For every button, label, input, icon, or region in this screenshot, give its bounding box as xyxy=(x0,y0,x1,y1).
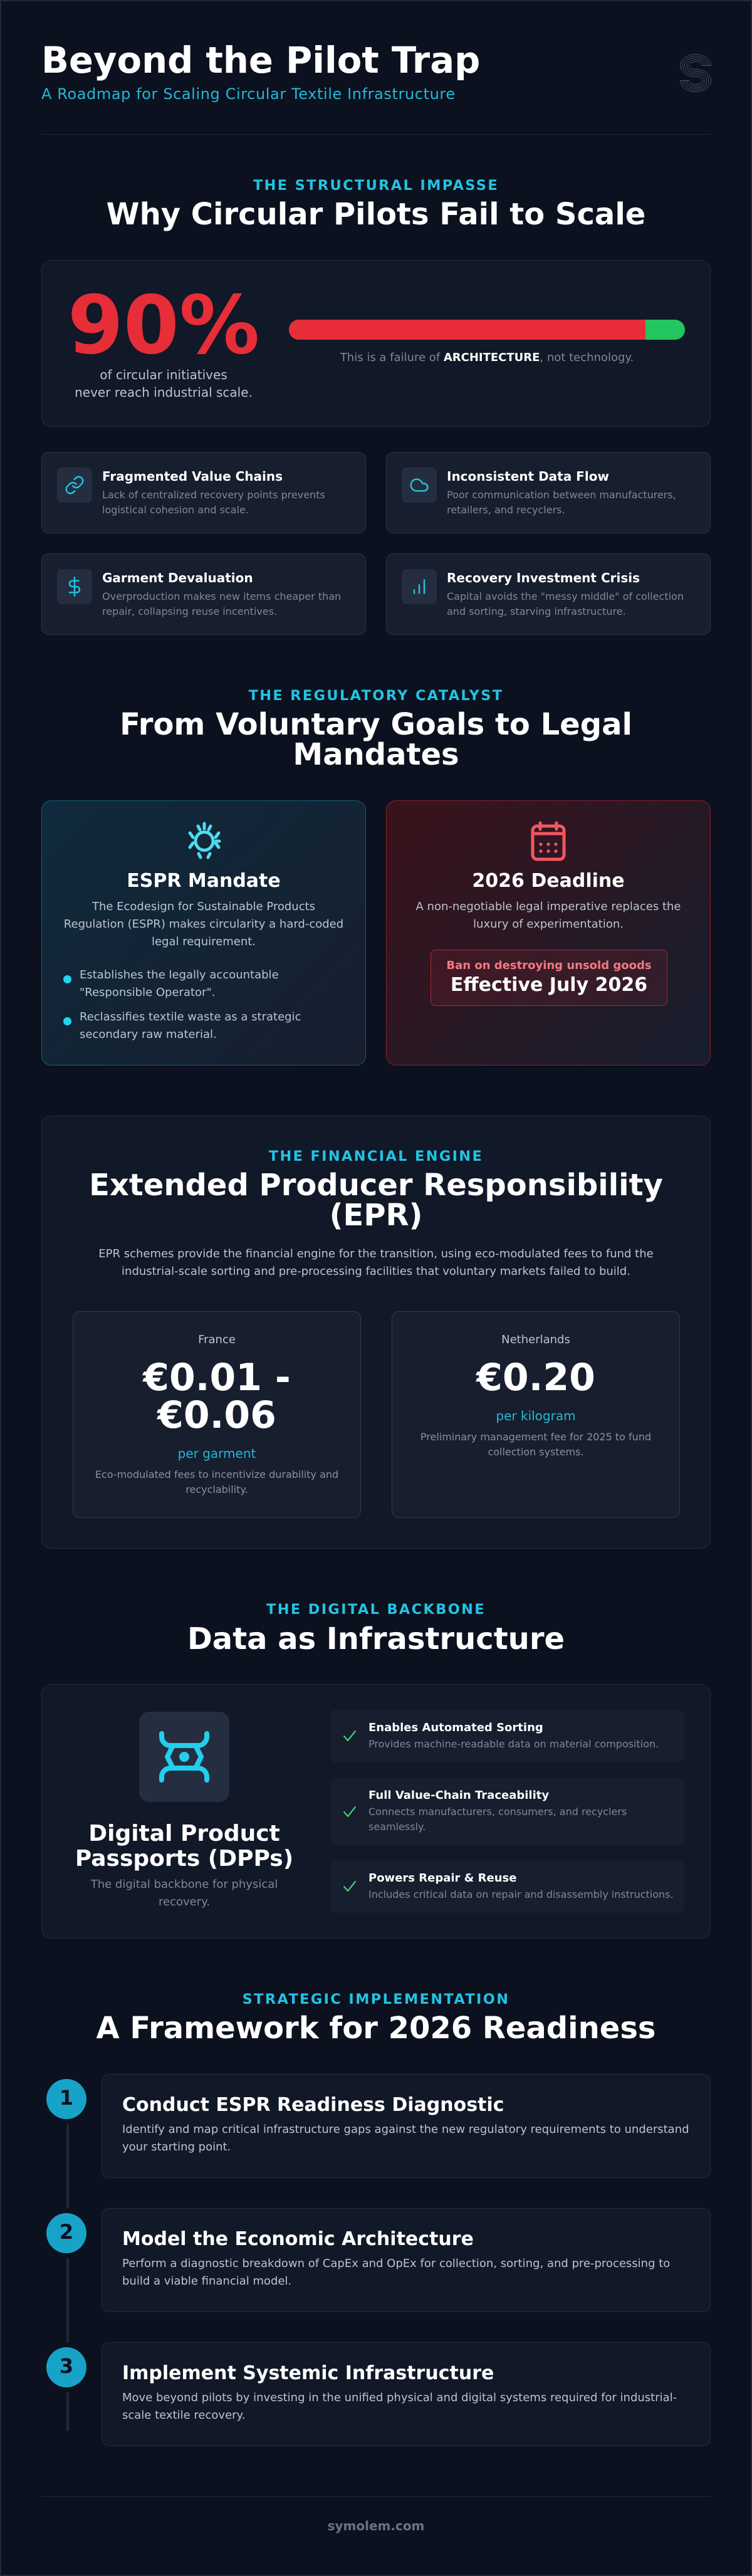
DPP title: Digital Product xyxy=(88,1821,280,1846)
feature: repair and reuse xyxy=(331,1860,684,1913)
step 2 number: 2 xyxy=(60,2220,73,2244)
card text: Lack of centralized recovery points prevents xyxy=(102,489,325,501)
unit: per kilogram xyxy=(496,1408,576,1423)
step title: Model the Economic Architecture xyxy=(122,2228,474,2250)
section heading: strategic implementation xyxy=(97,1991,655,2046)
card: recovery investment crisis xyxy=(386,553,711,635)
note: collection systems. xyxy=(488,1446,584,1458)
feature title: Full Value-Chain Traceability xyxy=(368,1789,549,1802)
step text: Move beyond pilots by investing in the unified physical and digital systems required for industrial- xyxy=(122,2391,677,2404)
panel: ESPR mandate xyxy=(41,800,366,1065)
connector line 2 xyxy=(66,2258,69,2342)
section heading: structural impasse xyxy=(107,177,645,232)
card text: The Ecodesign for Sustainable Products xyxy=(92,900,315,913)
step text: Perform a diagnostic breakdown of CapEx and OpEx for collection, sorting, and pre-processing to xyxy=(122,2257,670,2270)
value: €0.01 - xyxy=(143,1356,291,1400)
panel: digital product passports xyxy=(41,1684,711,1939)
icon: dollar xyxy=(57,569,92,604)
section heading: digital backbone xyxy=(187,1601,565,1657)
panel: 90 percent statistic xyxy=(41,260,711,427)
progress bar xyxy=(289,320,685,340)
icon: bug xyxy=(188,822,221,859)
title: Beyond the Pilot Trap xyxy=(41,39,480,81)
bullet 2: secondary raw material. xyxy=(80,1028,217,1041)
heading: From Voluntary Goals to Legal xyxy=(120,707,632,742)
card text xyxy=(102,590,341,617)
card heading: ESPR Mandate xyxy=(127,870,281,892)
card text: luxury of experimentation. xyxy=(473,918,624,931)
stat caption: of circular initiatives xyxy=(100,367,227,382)
card title: Inconsistent Data Flow xyxy=(447,469,609,484)
feature: automated sorting xyxy=(331,1710,684,1762)
unit: per garment xyxy=(178,1446,256,1461)
card text: Capital avoids the "messy middle" of collection xyxy=(447,590,684,602)
step text: Identify and map critical infrastructure gaps against the new regulatory requirements to understand xyxy=(122,2123,689,2136)
step text xyxy=(122,2391,677,2422)
connector line 1 xyxy=(66,2124,69,2208)
icon: check xyxy=(343,1806,356,1817)
step 3 card xyxy=(102,2342,711,2446)
icon: check xyxy=(343,1730,356,1741)
heading: (EPR) xyxy=(330,1198,422,1233)
heading: Extended Producer Responsibility xyxy=(89,1168,663,1203)
step title: Implement Systemic Infrastructure xyxy=(122,2362,494,2384)
country: Netherlands xyxy=(501,1333,570,1346)
step 2 number xyxy=(46,2213,86,2253)
step 1 number: 1 xyxy=(60,2086,73,2110)
big number: 90% xyxy=(68,279,259,372)
feature text: seamlessly. xyxy=(368,1821,426,1833)
icon: link xyxy=(57,468,92,503)
subtitle: A Roadmap for Scaling Circular Textile Infrastructure xyxy=(41,85,456,103)
card text: Regulation (ESPR) makes circularity a hard-coded xyxy=(64,918,343,931)
card: France xyxy=(73,1311,361,1518)
card: fragmented value chains xyxy=(41,452,366,533)
feature text xyxy=(368,1806,627,1833)
note: Preliminary management fee for 2025 to fund xyxy=(420,1431,651,1443)
card text xyxy=(102,489,325,516)
eyebrow: STRATEGIC IMPLEMENTATION xyxy=(243,1991,509,2008)
DPP description: The digital backbone for physical xyxy=(91,1878,278,1891)
icon: bars xyxy=(402,569,437,604)
DPP description: recovery. xyxy=(159,1895,210,1908)
eyebrow: THE FINANCIAL ENGINE xyxy=(269,1148,483,1165)
bullet 2: Reclassifies textile waste as a strategic xyxy=(80,1010,301,1024)
stat caption xyxy=(75,367,253,400)
feature text: Provides machine-readable data on material composition. xyxy=(368,1738,659,1750)
eyebrow: THE DIGITAL BACKBONE xyxy=(266,1601,486,1618)
callout: ban: Effective July 2026 xyxy=(451,974,647,996)
eyebrow: THE REGULATORY CATALYST xyxy=(249,688,503,704)
eyebrow: THE STRUCTURAL IMPASSE xyxy=(253,177,499,194)
step text: scale textile recovery. xyxy=(122,2409,245,2422)
card title: Fragmented Value Chains xyxy=(102,469,283,484)
heading: Why Circular Pilots Fail to Scale xyxy=(107,197,645,232)
intro text: industrial-scale sorting and pre-processing facilities that voluntary markets failed to build. xyxy=(122,1265,630,1278)
card title: Recovery Investment Crisis xyxy=(447,570,640,585)
card text: and sorting, starving infrastructure. xyxy=(447,605,626,617)
intro text: EPR schemes provide the financial engine for the transition, using eco-modulated fees to fund the xyxy=(98,1247,654,1260)
value: €0.20 xyxy=(476,1356,595,1400)
step text: your starting point. xyxy=(122,2140,231,2154)
feature: traceability xyxy=(331,1778,684,1845)
intro text xyxy=(98,1247,654,1278)
heading: A Framework for 2026 Readiness xyxy=(97,2011,655,2046)
card text: Overproduction makes new items cheaper than xyxy=(102,590,341,602)
bullet 2 xyxy=(63,1010,301,1041)
callout: ban: Ban on destroying unsold goods xyxy=(446,959,652,972)
card text: repair, collapsing reuse incentives. xyxy=(102,605,277,617)
card: inconsistent data flow xyxy=(386,452,711,533)
icon: logo S xyxy=(680,54,711,92)
value xyxy=(142,1356,291,1437)
footer xyxy=(41,2496,711,2541)
card title: Garment Devaluation xyxy=(102,570,253,585)
icon: DNA eye xyxy=(139,1712,229,1802)
heading xyxy=(120,707,632,772)
heading xyxy=(89,1168,663,1233)
icon: calendar xyxy=(531,821,565,861)
value: €0.06 xyxy=(157,1393,276,1437)
note: recyclability. xyxy=(185,1484,248,1495)
bullet 1: "Responsible Operator". xyxy=(80,986,215,999)
step 2 card xyxy=(102,2208,711,2312)
step 3 number xyxy=(46,2347,86,2387)
panel: 2026 deadline xyxy=(386,800,711,1065)
DPP title: Passports (DPPs) xyxy=(75,1846,293,1872)
card text xyxy=(447,590,684,617)
note: Eco-modulated fees to incentivize durability and xyxy=(95,1469,338,1480)
card text xyxy=(64,900,343,948)
card text: retailers, and recyclers. xyxy=(447,504,565,516)
step 1 card xyxy=(102,2074,711,2178)
stat caption: never reach industrial scale. xyxy=(75,385,253,400)
heading: Mandates xyxy=(293,737,459,772)
bullet 1 xyxy=(63,968,279,999)
card: garment devaluation xyxy=(41,553,366,635)
step 3 number: 3 xyxy=(60,2354,73,2378)
DPP description xyxy=(90,1878,278,1908)
DPP title xyxy=(75,1821,293,1872)
bar caption: This is a failure of ARCHITECTURE, not technology. xyxy=(340,351,634,364)
card text xyxy=(447,489,676,516)
card text: Poor communication between manufacturers, xyxy=(447,489,676,501)
card text: A non-negotiable legal imperative replaces the xyxy=(416,900,681,913)
bullet 1: Establishes the legally accountable xyxy=(80,968,279,982)
feature title: Enables Automated Sorting xyxy=(368,1721,543,1734)
heading: Data as Infrastructure xyxy=(187,1621,565,1657)
feature text: Includes critical data on repair and disassembly instructions. xyxy=(368,1888,674,1900)
panel: financial engine xyxy=(41,1116,711,1549)
card text: legal requirement. xyxy=(152,935,256,948)
icon: cloud xyxy=(402,468,437,503)
footer: symolem.com xyxy=(328,2518,424,2533)
card: Netherlands xyxy=(392,1311,680,1518)
icon: check xyxy=(343,1881,356,1892)
note xyxy=(420,1431,651,1458)
step text: build a viable financial model. xyxy=(122,2275,291,2288)
step text xyxy=(122,2123,689,2154)
connector line 3 xyxy=(66,2392,69,2431)
section heading: regulatory catalyst xyxy=(120,688,632,772)
step 1 number xyxy=(46,2079,86,2119)
feature title: Powers Repair & Reuse xyxy=(368,1872,516,1885)
callout: ban xyxy=(431,950,667,1006)
note xyxy=(95,1469,338,1495)
card text: logistical cohesion and scale. xyxy=(102,504,249,516)
feature text: Connects manufacturers, consumers, and recyclers xyxy=(368,1806,627,1818)
header xyxy=(41,31,711,135)
step text xyxy=(122,2257,670,2288)
step title: Conduct ESPR Readiness Diagnostic xyxy=(122,2094,504,2116)
card heading: 2026 Deadline xyxy=(472,870,625,892)
card text xyxy=(416,900,681,931)
country: France xyxy=(198,1333,236,1346)
